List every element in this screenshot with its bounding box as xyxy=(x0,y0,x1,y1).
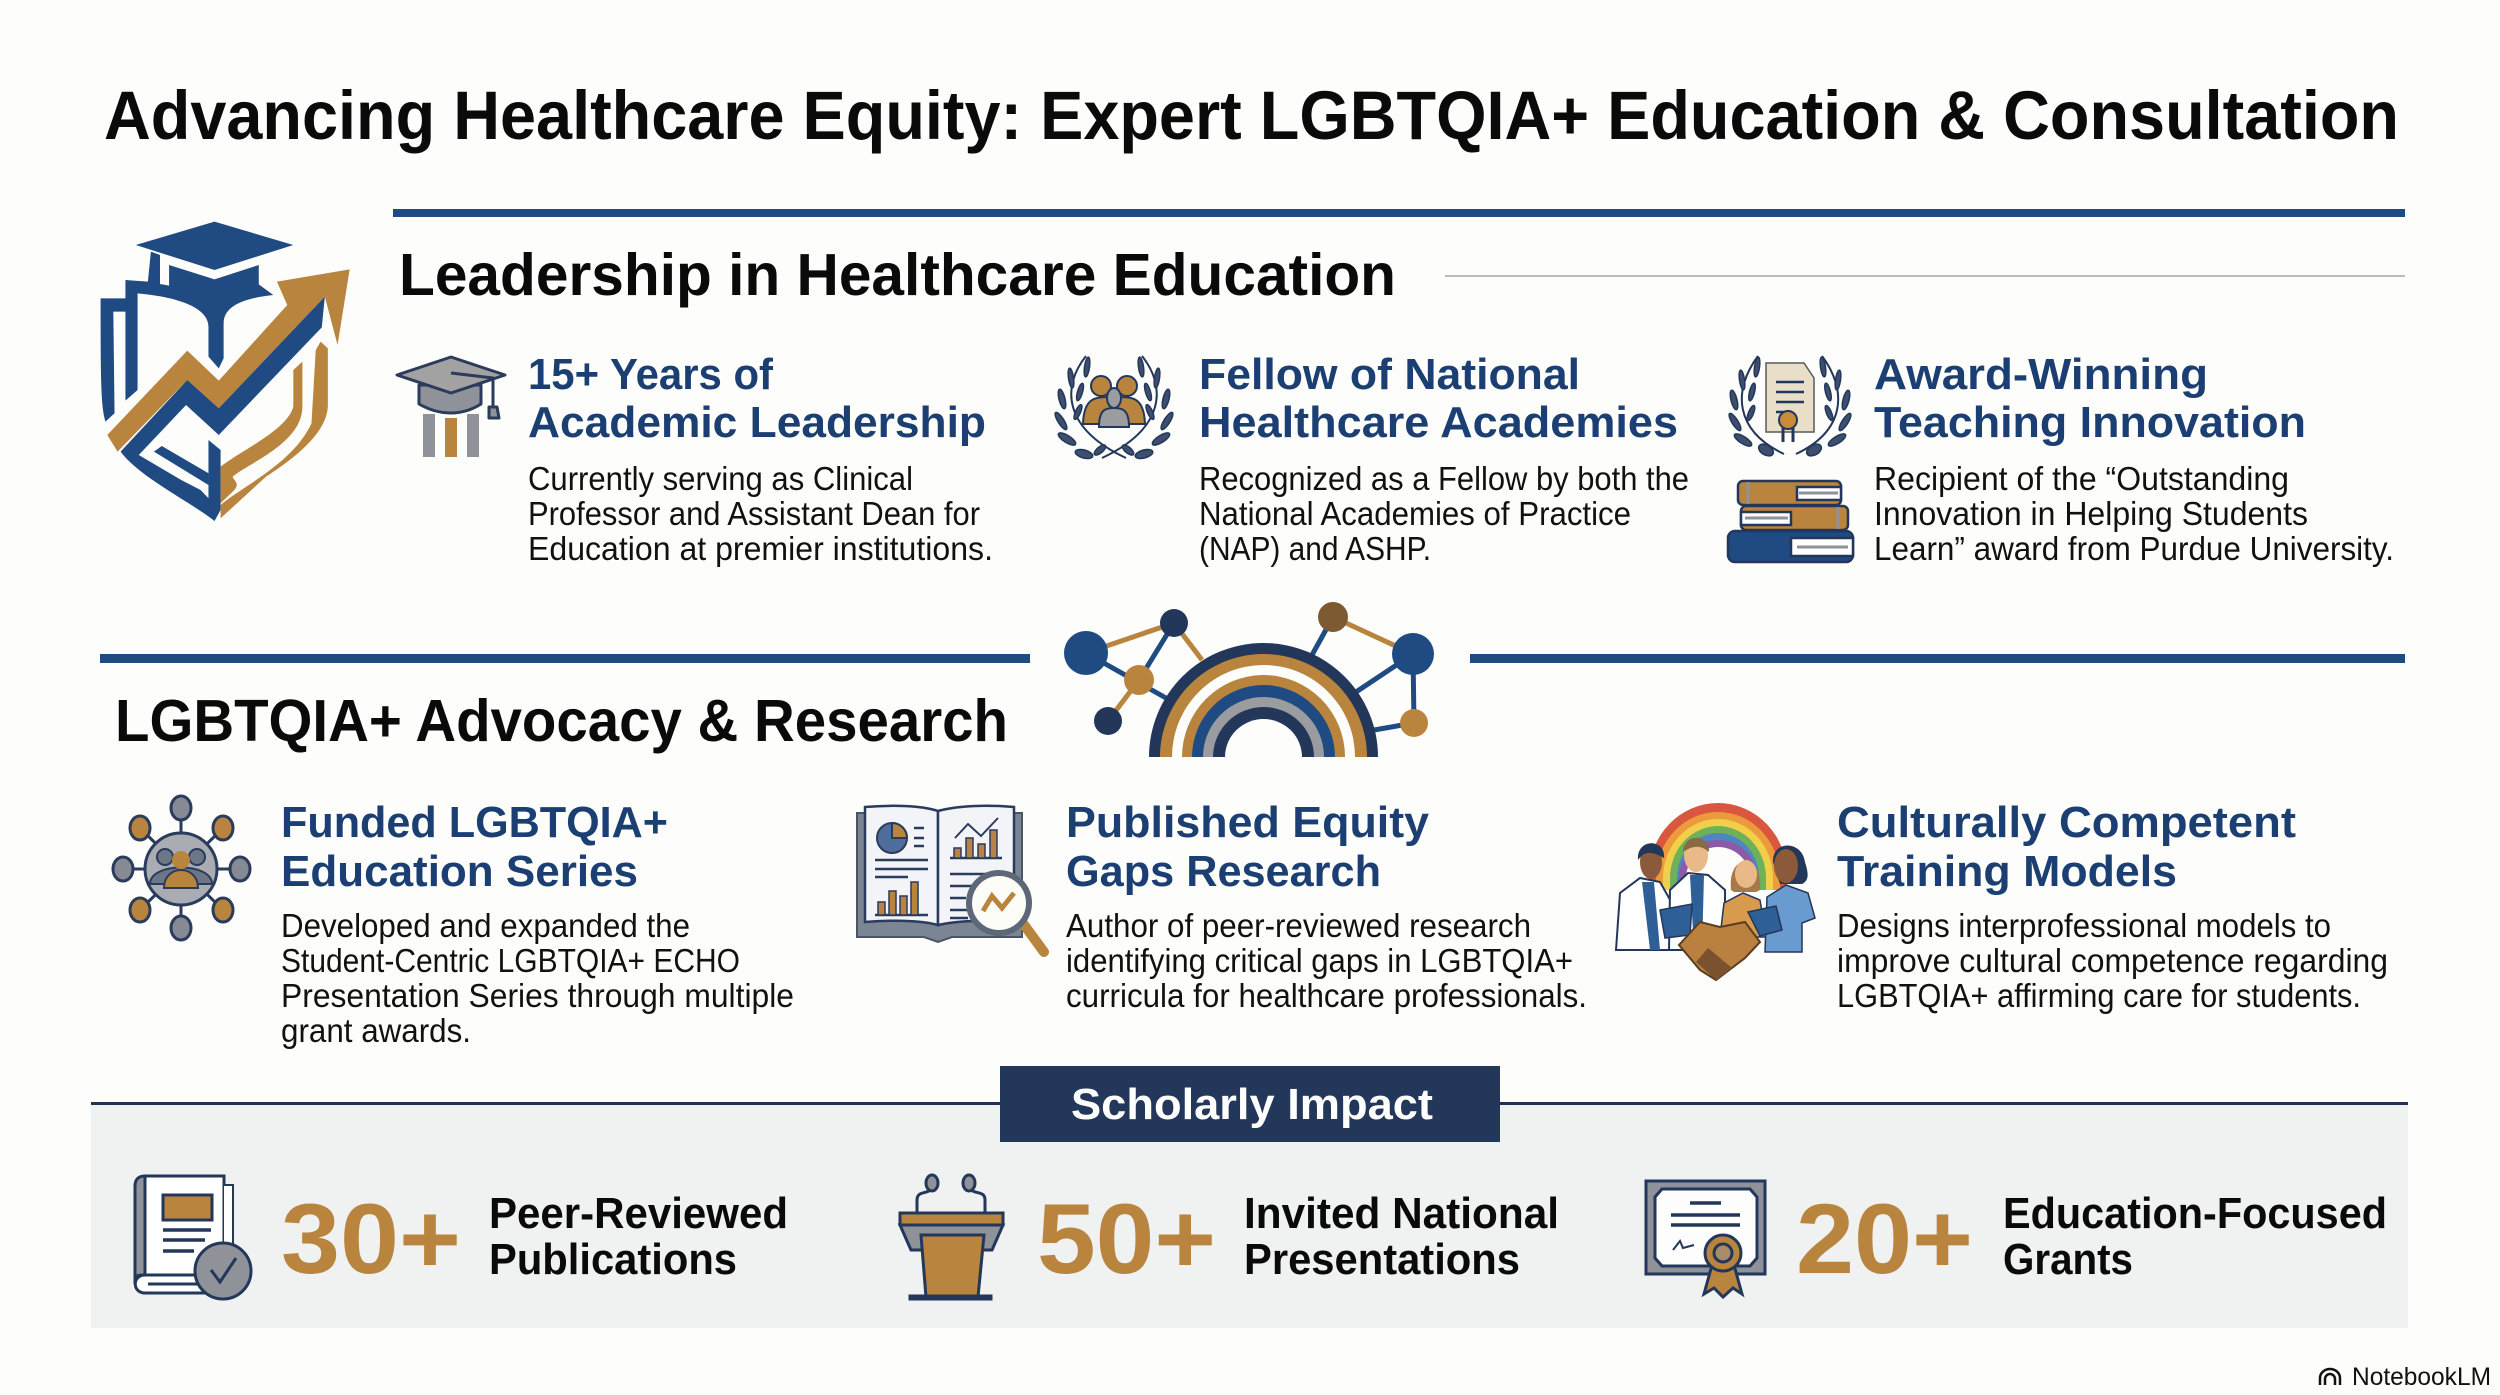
heading: Award-Winning xyxy=(1874,350,2208,399)
label: Presentations xyxy=(1244,1235,1520,1284)
description xyxy=(1837,907,2388,1014)
heading badge: scholarly impact xyxy=(1000,1066,1500,1142)
description: Education at premier institutions. xyxy=(528,530,993,567)
description xyxy=(1066,907,1587,1014)
description: identifying critical gaps in LGBTQIA+ xyxy=(1066,942,1573,979)
heading xyxy=(281,798,668,896)
item: culturally competent training xyxy=(1616,798,2388,1014)
panel: scholarly impact xyxy=(91,1066,2408,1328)
watermark: notebooklm: NotebookLM xyxy=(2352,1363,2491,1391)
icon: laurel wreath with people xyxy=(1053,356,1175,460)
description: Learn” award from Purdue University. xyxy=(1874,530,2394,567)
heading: Fellow of National xyxy=(1199,350,1580,399)
item: academic leadership xyxy=(397,350,993,567)
item: award-winning teaching xyxy=(1727,350,2394,567)
heading badge: scholarly impact: Scholarly Impact xyxy=(1071,1080,1433,1129)
heading: Healthcare Academies xyxy=(1199,398,1678,447)
label xyxy=(489,1189,788,1284)
icon: book with check badge xyxy=(135,1176,251,1299)
description: Professor and Assistant Dean for xyxy=(528,495,980,532)
description: Recognized as a Fellow by both the xyxy=(1199,460,1689,497)
description: Student-Centric LGBTQIA+ ECHO xyxy=(281,942,740,979)
heading: Funded LGBTQIA+ xyxy=(281,798,668,847)
heading: advocacy: LGBTQIA+ Advocacy & Research xyxy=(115,688,1008,754)
heading: Gaps Research xyxy=(1066,847,1381,896)
item: funded education series xyxy=(113,796,794,1049)
heading: Academic Leadership xyxy=(528,398,986,447)
label: Grants xyxy=(2003,1235,2133,1284)
stat: grants xyxy=(1646,1181,2387,1297)
description: Currently serving as Clinical xyxy=(528,460,913,497)
description: grant awards. xyxy=(281,1012,471,1049)
icon: framed certificate with ribbon xyxy=(1646,1181,1765,1297)
icon: network nodes and arched rainbow xyxy=(1064,602,1434,757)
title: Advancing Healthcare Equity: Expert LGBTQIA+ Education & Consultation xyxy=(104,77,2399,154)
description xyxy=(1874,460,2394,567)
description: Presentation Series through multiple xyxy=(281,977,794,1014)
icon: network of people xyxy=(113,796,250,940)
heading: Training Models xyxy=(1837,847,2177,896)
heading: leadership: Leadership in Healthcare Education xyxy=(399,242,1396,308)
value: 50+ xyxy=(1037,1183,1216,1294)
heading xyxy=(1199,350,1678,447)
icon: podium with microphones xyxy=(900,1175,1003,1299)
heading xyxy=(528,350,986,447)
stat: publications xyxy=(135,1176,788,1299)
description: Author of peer-reviewed research xyxy=(1066,907,1531,944)
description: curricula for healthcare professionals. xyxy=(1066,977,1587,1014)
heading xyxy=(1874,350,2306,447)
description: Recipient of the “Outstanding xyxy=(1874,460,2289,497)
item: published equity gaps research xyxy=(857,798,1587,1014)
heading: 15+ Years of xyxy=(528,350,773,399)
description: (NAP) and ASHP. xyxy=(1199,530,1431,567)
description xyxy=(281,907,794,1049)
label: Invited National xyxy=(1244,1189,1559,1238)
label xyxy=(1244,1189,1559,1284)
item: fellow of national academies xyxy=(1053,350,1689,567)
value: 30+ xyxy=(281,1183,461,1294)
description xyxy=(528,460,993,567)
icon: open book with charts and magnifier xyxy=(857,806,1044,952)
description: improve cultural competence regarding xyxy=(1837,942,2388,979)
icon: stack of books xyxy=(1728,481,1853,562)
value: 20+ xyxy=(1796,1183,1973,1294)
description xyxy=(1199,460,1689,567)
stat: presentations xyxy=(900,1175,1559,1299)
section: leadership in healthcare education xyxy=(393,209,2405,567)
description: Innovation in Helping Students xyxy=(1874,495,2308,532)
icon: laurel wreath with certificate xyxy=(1727,356,1853,458)
heading xyxy=(1066,798,1430,896)
icon: rainbow, clinicians and handshake xyxy=(1616,803,1815,980)
description: LGBTQIA+ affirming care for students. xyxy=(1837,977,2361,1014)
heading: Teaching Innovation xyxy=(1874,398,2306,447)
label xyxy=(2003,1189,2387,1284)
description: National Academies of Practice xyxy=(1199,495,1631,532)
section: lgbtqia+ advocacy and research xyxy=(113,688,2388,1049)
icon: shield logo with graduation cap and rising arrow xyxy=(101,222,350,521)
label: Peer-Reviewed xyxy=(489,1189,788,1238)
heading: Education Series xyxy=(281,847,638,896)
heading xyxy=(1837,798,2296,896)
heading: Published Equity xyxy=(1066,798,1430,847)
label: Education-Focused xyxy=(2003,1189,2387,1238)
description: Designs interprofessional models to xyxy=(1837,907,2331,944)
icon: graduation cap and columns xyxy=(397,357,505,457)
description: Developed and expanded the xyxy=(281,907,690,944)
heading: Culturally Competent xyxy=(1837,798,2296,847)
label: Publications xyxy=(489,1235,737,1284)
